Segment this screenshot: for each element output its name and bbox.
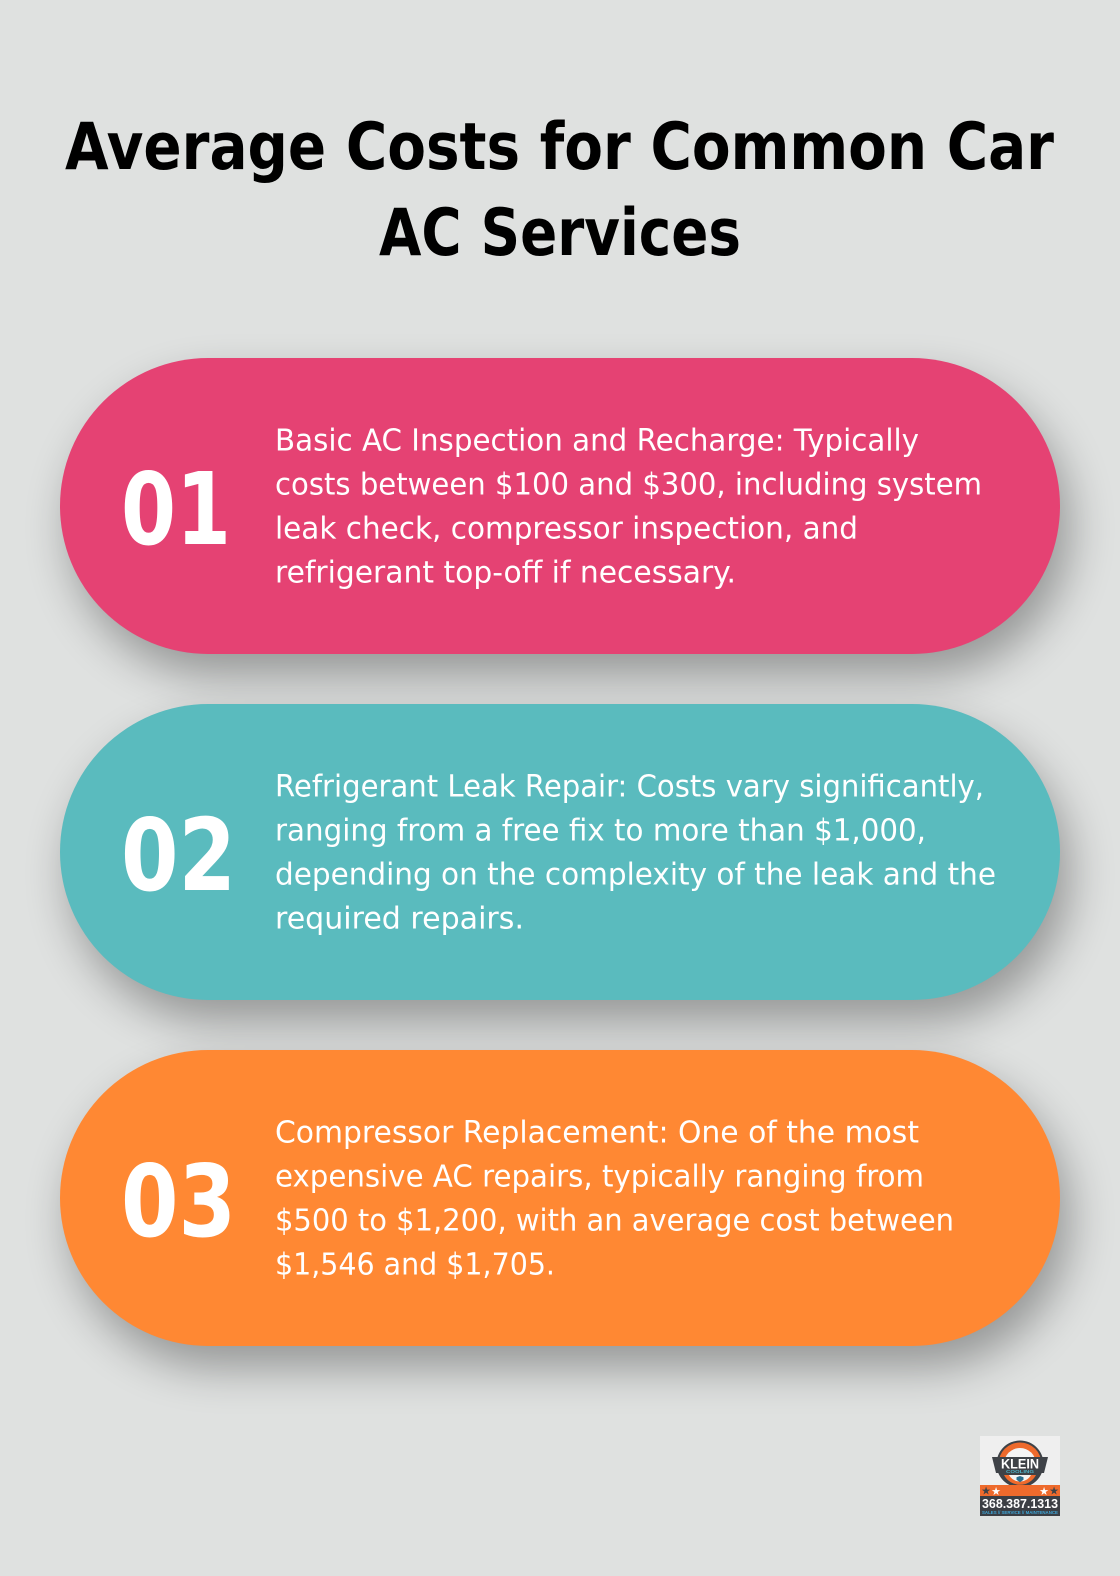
title bbox=[65, 110, 1054, 271]
text: leak repair description: Refrigerant Leak Repair: Costs vary significantly, bbox=[275, 770, 984, 804]
text: compressor replacement description bbox=[275, 1116, 954, 1282]
logo: Klein Cooling: ★ bbox=[981, 1484, 991, 1498]
text: leak repair description: ranging from a free fix to more than $1,000, bbox=[275, 814, 926, 848]
logo: Klein Cooling: KLEIN bbox=[1001, 1456, 1039, 1472]
text: leak repair description: depending on the complexity of the leak and the bbox=[275, 858, 996, 892]
text: compressor replacement description: Compressor Replacement: One of the most bbox=[275, 1116, 919, 1150]
number 02: 02 bbox=[121, 797, 236, 914]
text: basic AC inspection description: costs between $100 and $300, including system bbox=[275, 468, 982, 502]
text: basic AC inspection description: leak check, compressor inspection, and bbox=[275, 512, 858, 546]
number 01: 01 bbox=[121, 451, 231, 568]
logo: Klein Cooling: SALES // SERVICE // MAINTENANCE bbox=[982, 1510, 1058, 1515]
logo: Klein Cooling: ★ bbox=[1039, 1485, 1049, 1498]
text: basic AC inspection description bbox=[275, 424, 982, 590]
logo: Klein Cooling: COOLING bbox=[1006, 1469, 1035, 1474]
text: compressor replacement description: $500 to $1,200, with an average cost between bbox=[275, 1204, 954, 1238]
text: leak repair description: required repairs. bbox=[275, 902, 524, 936]
text: basic AC inspection description: refrigerant top-off if necessary. bbox=[275, 556, 736, 590]
panel: basic AC inspection bbox=[60, 358, 1060, 654]
text: compressor replacement description: $1,546 and $1,705. bbox=[275, 1248, 555, 1282]
number 03: 03 bbox=[121, 1143, 236, 1260]
logo: Klein Cooling: ★ bbox=[991, 1485, 1001, 1498]
panel: compressor replacement bbox=[60, 1050, 1060, 1346]
logo: Klein Cooling: ★ bbox=[1049, 1484, 1059, 1498]
title: AC Services bbox=[379, 196, 741, 271]
logo: Klein Cooling: 368.387.1313 bbox=[982, 1497, 1058, 1511]
text: leak repair description bbox=[275, 770, 996, 936]
panel: refrigerant leak repair bbox=[60, 704, 1060, 1000]
text: basic AC inspection description: Basic AC Inspection and Recharge: Typically bbox=[275, 424, 919, 458]
text: compressor replacement description: expensive AC repairs, typically ranging from bbox=[275, 1160, 924, 1194]
logo: Klein Cooling bbox=[980, 1436, 1060, 1516]
